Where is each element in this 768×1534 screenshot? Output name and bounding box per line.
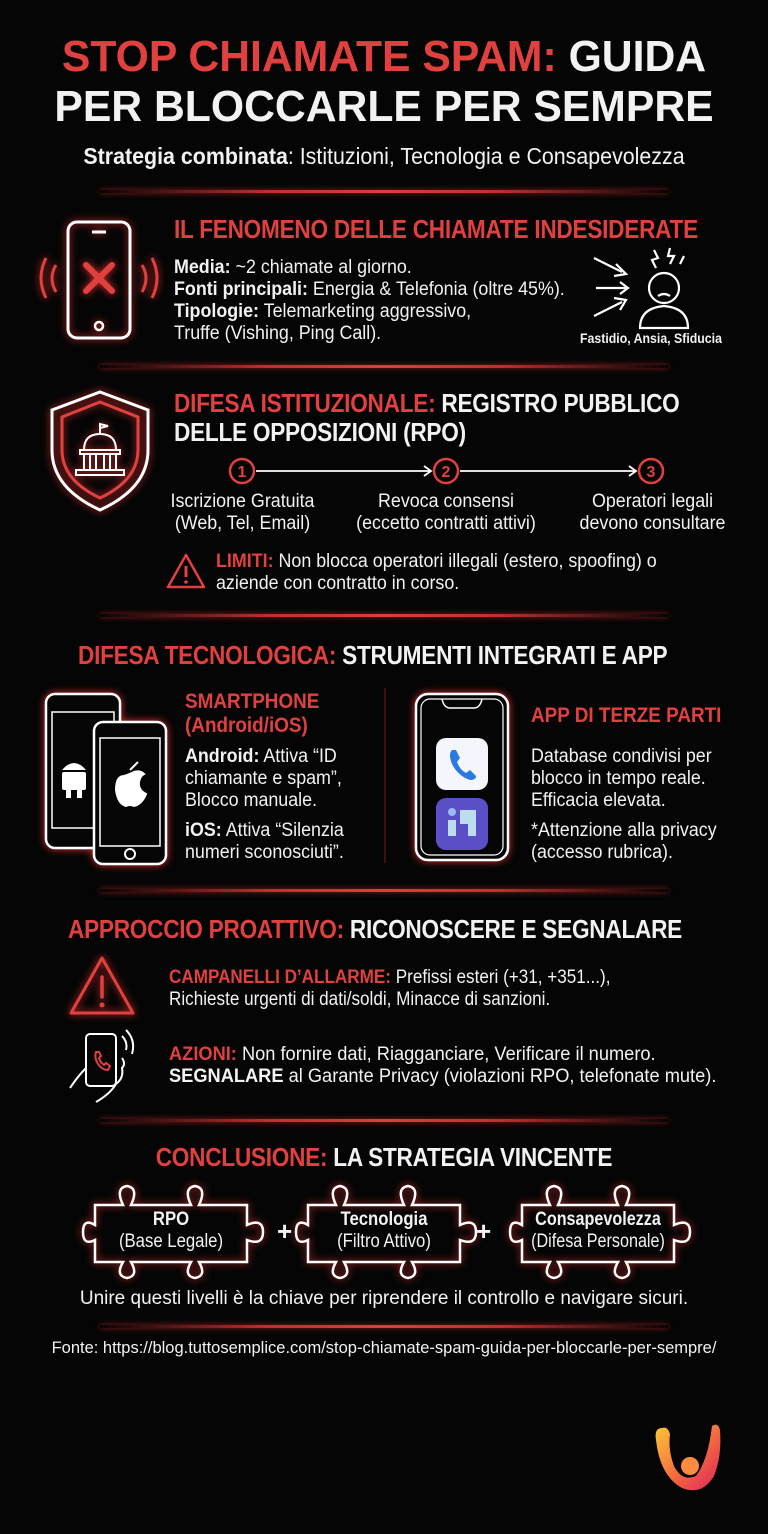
heading: DELLE OPPOSIZIONI (RPO): [174, 417, 466, 447]
panel: conclusione: Consapevolezza: [535, 1209, 661, 1230]
app text: [531, 746, 712, 811]
step labels: (Web, Tel, Email): [175, 513, 310, 534]
icon: alarm triangle: [64, 952, 140, 1021]
heading: IL FENOMENO DELLE CHIAMATE INDESIDERATE: [174, 214, 698, 244]
panel: conclusione: (Filtro Attivo): [337, 1231, 431, 1252]
app text: Efficacia elevata.: [531, 790, 666, 811]
text block: Truffe (Vishing, Ping Call).: [174, 323, 381, 344]
icon: warning: [166, 554, 206, 588]
step labels: Iscrizione Gratuita: [171, 491, 314, 512]
panel: conclusione: [76, 1142, 697, 1309]
privacy note: *Attenzione alla privacy: [531, 820, 717, 841]
ios text: numeri sconosciuti”.: [185, 842, 344, 863]
ios text: [185, 820, 344, 863]
heading: [174, 388, 679, 447]
actions text: AZIONI: Non fornire dati, Riagganciare, Verificare il numero.: [169, 1044, 656, 1065]
caption: Fastidio, Ansia, Sfiducia: [580, 330, 722, 346]
source: Fonte: https://blog.tuttosemplice.com/stop-chiamate-spam-guida-per-bloccarle-per-sempre/: [52, 1339, 716, 1357]
smartphone heading: [185, 690, 319, 737]
panel: conclusione: (Difesa Personale): [531, 1231, 665, 1252]
icon: hand with phone: [69, 1029, 134, 1103]
title: STOP CHIAMATE SPAM: GUIDA: [62, 32, 706, 81]
smartphone heading: SMARTPHONE: [185, 690, 319, 713]
heading: DIFESA TECNOLOGICA: STRUMENTI INTEGRATI E APP: [78, 640, 667, 670]
warning signs text: [169, 967, 611, 1010]
app heading: APP DI TERZE PARTI: [531, 704, 721, 727]
icon: two smartphones: [38, 686, 174, 872]
step labels: [171, 491, 314, 534]
icon: shield: [44, 385, 156, 517]
limits text: aziende con contratto in corso.: [216, 573, 459, 594]
steps flow: Operatori legali: [592, 491, 713, 512]
text block: Fonti principali: Energia & Telefonia (oltre 45%).: [174, 279, 565, 300]
puzzle labels: [119, 1209, 223, 1252]
plus signs: +: [277, 1216, 292, 1246]
actions text: [169, 1044, 716, 1087]
smartphone text: Blocco manuale.: [185, 790, 317, 811]
ios text: iOS: Attiva “Silenzia: [185, 820, 344, 841]
smartphone text: Android: Attiva “ID: [185, 746, 337, 767]
steps flow: [171, 458, 725, 534]
warning signs text: Richieste urgenti di dati/soldi, Minacce di sanzioni.: [169, 989, 550, 1010]
app text: Database condivisi per: [531, 746, 712, 767]
steps flow: 1: [238, 464, 247, 481]
smartphone heading: (Android/iOS): [185, 714, 308, 737]
logo: [656, 1424, 720, 1490]
panel: conclusione: Tecnologia: [340, 1209, 428, 1230]
icon: phone blocked: [33, 214, 164, 346]
panel: approccio proattivo: [64, 914, 716, 1103]
puzzle pieces: [76, 1179, 697, 1284]
panel: difesa tecnologica: [38, 640, 721, 872]
privacy note: [531, 820, 717, 863]
panel: conclusione: +: [476, 1216, 491, 1246]
title: PER BLOCCARLE PER SEMPRE: [54, 82, 714, 131]
conclusion text: Unire questi livelli è la chiave per riprendere il controllo e navigare sicuri.: [80, 1288, 688, 1309]
limits text: LIMITI: Non blocca operatori illegali (estero, spoofing) o: [216, 551, 657, 572]
heading: DIFESA ISTITUZIONALE: REGISTRO PUBBLICO: [174, 388, 679, 418]
steps flow: 3: [647, 464, 656, 481]
steps flow: Revoca consensi: [378, 491, 514, 512]
steps flow: devono consultare: [580, 513, 725, 534]
text block: Media: ~2 chiamate al giorno.: [174, 257, 412, 278]
smartphone text: chiamante e spam”,: [185, 768, 342, 789]
heading: APPROCCIO PROATTIVO: RICONOSCERE E SEGNALARE: [68, 914, 682, 944]
privacy note: (accesso rubrica).: [531, 842, 673, 863]
steps flow: 2: [442, 464, 451, 481]
actions text: SEGNALARE al Garante Privacy (violazioni RPO, telefonate mute).: [169, 1066, 716, 1087]
title: [54, 32, 714, 131]
app text: blocco in tempo reale.: [531, 768, 706, 789]
panel: difesa istituzionale: [44, 385, 725, 594]
text block: Tipologie: Telemarketing aggressivo,: [174, 301, 471, 322]
warning signs text: CAMPANELLI D’ALLARME: Prefissi esteri (+31, +351...),: [169, 967, 611, 988]
icon: phone with apps: [408, 686, 516, 868]
limits text: [216, 551, 657, 594]
panel: fenomeno: [33, 214, 722, 346]
text block: [174, 257, 565, 344]
puzzle labels: (Base Legale): [119, 1231, 223, 1252]
subtitle: Strategia combinata: Istituzioni, Tecnologia e Consapevolezza: [83, 143, 685, 169]
icon: stressed person: [594, 248, 690, 330]
smartphone text: [185, 746, 342, 811]
heading: CONCLUSIONE: LA STRATEGIA VINCENTE: [156, 1142, 612, 1172]
steps flow: (eccetto contratti attivi): [356, 513, 536, 534]
puzzle labels: RPO: [153, 1209, 189, 1230]
